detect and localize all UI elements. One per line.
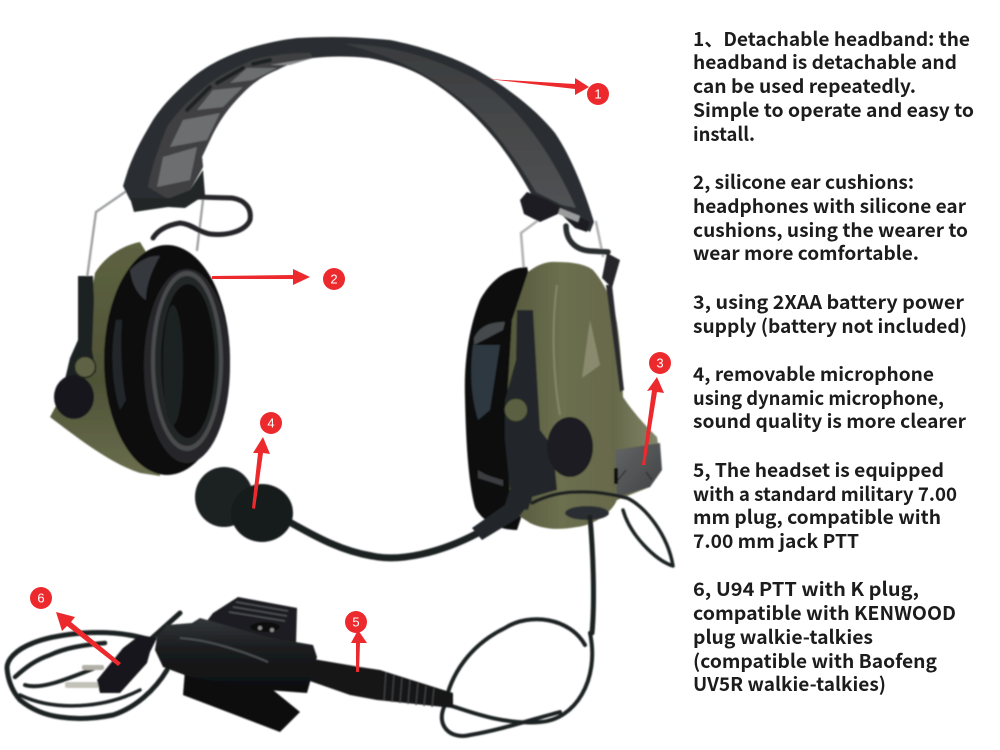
rear stem — [602, 253, 620, 288]
feature text 5: military plug — [693, 456, 957, 554]
left foam — [54, 375, 94, 419]
right knob — [504, 398, 528, 422]
right cushion — [465, 267, 560, 530]
feature text 3: battery power: 3, using 2XAA battery power — [693, 288, 965, 315]
PTT connector — [307, 658, 453, 708]
K plug body — [97, 635, 157, 693]
headband padding windows — [157, 58, 313, 187]
feature text 5: military plug: 7.00 mm jack PTT — [693, 527, 859, 554]
right arm — [505, 310, 557, 510]
feature text 3: battery power: supply (battery not included) — [693, 312, 967, 339]
annotation arrow 3: 3 — [656, 356, 664, 370]
left ear cup — [50, 242, 230, 476]
PTT top clip — [200, 597, 297, 645]
microphone boom — [195, 467, 532, 558]
headband left end clip — [130, 170, 205, 212]
feature text 1: detachable headband: can be used repeatedly. — [693, 72, 916, 99]
feature text 5: military plug: 5, The headset is equipped — [693, 456, 944, 483]
feature text 6: U94 PTT — [693, 575, 956, 697]
feature text 3: battery power — [693, 288, 967, 339]
wires and coiled lead — [87, 190, 608, 310]
feature text 6: U94 PTT: UV5R walkie-talkies) — [693, 670, 886, 697]
side cable loop — [532, 492, 673, 566]
annotation arrow 6 — [30, 587, 121, 666]
left knob — [74, 356, 96, 378]
annotation arrow 3 — [642, 352, 671, 465]
feature text 6: U94 PTT: 6, U94 PTT with K plug, — [693, 575, 919, 602]
long cable with loops — [442, 517, 593, 736]
feature text 4: removable microphone: sound quality is more clearer — [693, 407, 967, 434]
feature text 1: detachable headband: Simple to operate and easy to — [693, 96, 974, 123]
PTT unit — [155, 597, 453, 732]
annotation arrow 2: 2 — [330, 272, 338, 286]
feature text 5: military plug: mm plug, compatible with — [693, 503, 941, 530]
ear cup opening — [161, 284, 215, 438]
right ear cup — [465, 253, 662, 530]
feature text 2: silicone ear cushions: wear more comfortable. — [693, 239, 919, 266]
feature text 6: U94 PTT: compatible with KENWOOD — [693, 599, 956, 626]
headband right grey band — [345, 44, 576, 208]
feature text 2: silicone ear cushions: 2, silicone ear cushions: — [693, 168, 914, 195]
feature text 4: removable microphone — [693, 360, 967, 434]
inner ring — [144, 269, 230, 463]
K plug coiled cable — [7, 613, 180, 718]
headset product photo — [7, 37, 673, 736]
battery compartment — [615, 443, 662, 497]
annotation arrow 6: 6 — [37, 590, 45, 606]
microphone foam windshields — [195, 467, 253, 527]
feature text 1: detachable headband: install. — [693, 120, 755, 147]
headband left frame — [148, 53, 313, 200]
feature text 2: silicone ear cushions — [693, 168, 968, 266]
annotation arrow 1 — [488, 78, 609, 105]
left shell — [50, 242, 175, 476]
annotation arrow 5 — [345, 611, 367, 672]
feature text 5: military plug: with a standard military 7.00 — [693, 480, 957, 507]
annotation arrow 2 — [212, 268, 345, 290]
feature text 1: detachable headband: 1、Detachable headband: the — [693, 25, 970, 52]
feature text 1: detachable headband: headband is detachable and — [693, 48, 957, 75]
feature text 4: removable microphone: using dynamic microphone, — [693, 384, 944, 411]
cable badge — [565, 506, 609, 520]
annotation arrow 4 — [252, 412, 282, 509]
PTT bottom clip — [183, 670, 300, 732]
right side microphone foam — [547, 417, 593, 477]
feature text 4: removable microphone: 4, removable microphone — [693, 360, 934, 387]
right shell — [507, 262, 660, 529]
feature text 6: U94 PTT: plug walkie-talkies — [693, 623, 873, 650]
feature text 2: silicone ear cushions: headphones with silicone ear — [693, 192, 967, 219]
annotation arrow 5: 5 — [352, 614, 360, 630]
headband right end clip — [520, 192, 590, 232]
annotation arrow 4: 4 — [267, 416, 275, 430]
headband — [123, 37, 594, 232]
feature text 2: silicone ear cushions: cushions, using the wearer to — [693, 216, 968, 243]
PTT body — [155, 618, 317, 693]
annotation arrow 1: 1 — [594, 86, 602, 102]
feature text 1: detachable headband — [693, 25, 974, 147]
left arm — [62, 276, 96, 392]
silicone ear cushion — [104, 245, 230, 475]
feature text 6: U94 PTT: (compatible with Baofeng — [693, 647, 938, 674]
